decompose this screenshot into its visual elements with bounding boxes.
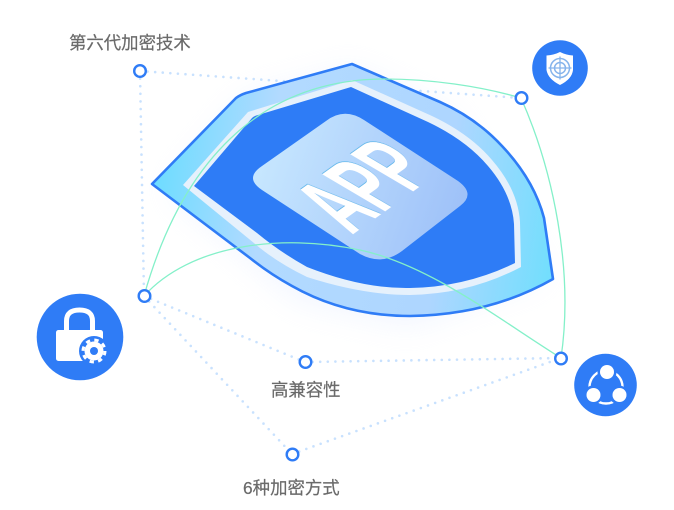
label: six encryption methods: 6种加密方式 (243, 478, 340, 498)
node: compatibility (300, 356, 311, 368)
shield outer band (152, 64, 553, 316)
shield glow (170, 70, 545, 325)
node: lock icon (139, 290, 150, 302)
label: high compatibility: 高兼容性 (271, 380, 341, 400)
shield (152, 64, 553, 316)
icon: lock with gear (37, 294, 123, 380)
node: share icon (555, 353, 567, 364)
label: sixth generation encryption: 第六代加密技术 (69, 33, 191, 53)
app label: APP (269, 124, 458, 247)
node: shield icon (516, 92, 527, 104)
shield white rim (183, 80, 521, 295)
icon: share network (574, 354, 637, 416)
green curves (144, 79, 565, 358)
node: encryption tech (134, 65, 146, 77)
icon: shield target (532, 40, 588, 96)
tile background (253, 114, 468, 259)
shield inner face (194, 87, 515, 288)
node: encryption modes (287, 449, 298, 460)
app tile (253, 114, 468, 259)
dotted connector lines (140, 71, 561, 454)
